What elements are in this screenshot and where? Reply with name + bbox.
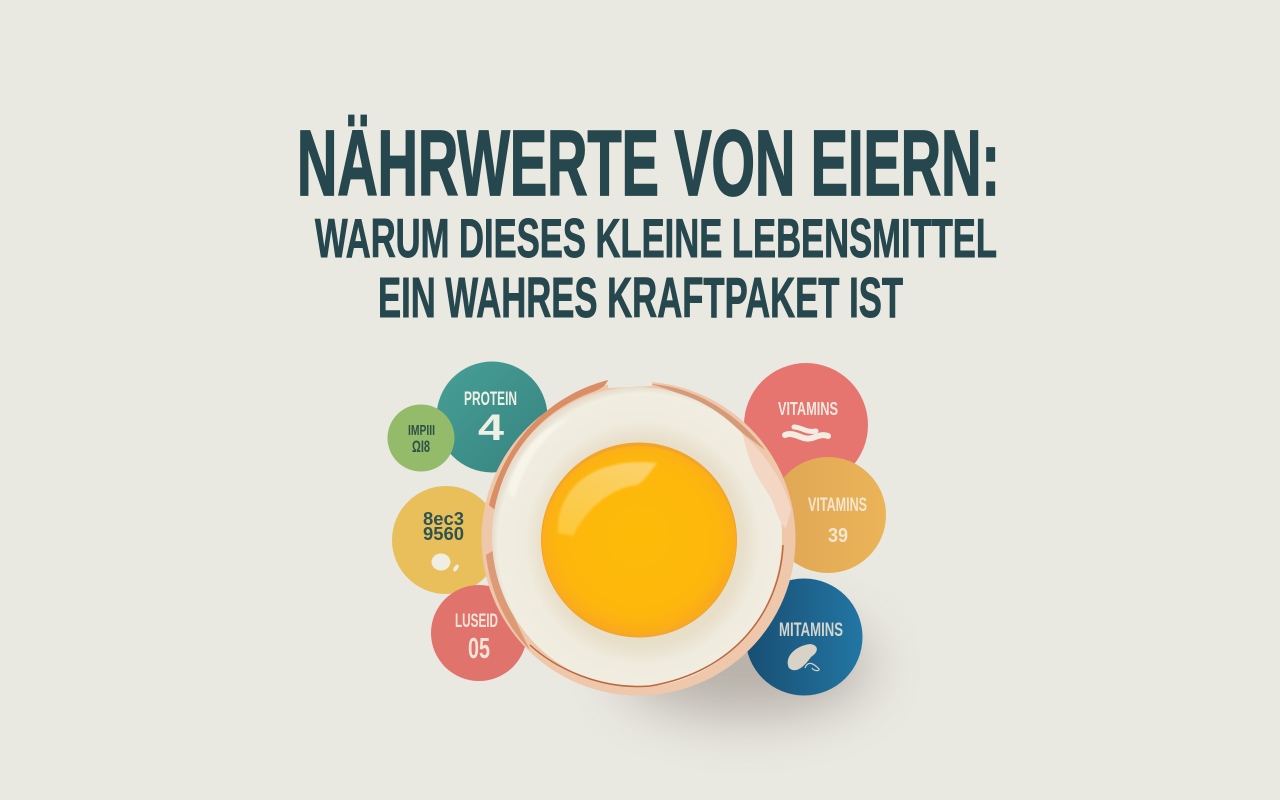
shell thin line: [530, 545, 783, 686]
title: [297, 111, 1000, 330]
shell gap at top: [608, 379, 652, 388]
egg: [482, 379, 796, 696]
circle: vitamins amber: 39: [828, 525, 848, 547]
circle: lutein: 05: [468, 633, 490, 665]
yolk highlight: [558, 462, 657, 536]
eggshell: [482, 380, 796, 696]
circle: vitamins amber: VITAMINS: [808, 495, 867, 516]
circle: vitamins blue: [746, 578, 862, 696]
title line 3: EIN WAHRES KRAFTPAKET IST: [378, 266, 903, 330]
yolk: [541, 442, 737, 638]
circle: protein: PROTEIN: [464, 389, 517, 410]
circle: yellow nutrient: 8ec3: [423, 509, 464, 529]
circle: vitamins red: VITAMINS: [778, 399, 838, 419]
circle: lutein: LUSEID: [455, 611, 498, 632]
circle: protein: 4: [478, 407, 505, 448]
egg white: [492, 387, 782, 687]
circle: lutein: [431, 585, 527, 681]
egg drop shadow: [620, 615, 870, 715]
shell fragment: [743, 435, 791, 528]
circle: protein: [436, 362, 548, 472]
circle: green nutrient: ΩI8: [412, 437, 430, 456]
circle: vitamins red: [744, 363, 868, 487]
yolk lower shading: [575, 565, 728, 629]
circle: yellow nutrient: [392, 486, 500, 594]
circle: vitamins blue: MITAMINS: [779, 620, 843, 641]
circle: yellow nutrient: 9560: [423, 524, 464, 544]
circle: green nutrient: IMPIII: [408, 422, 435, 439]
icon: wavy shape: [785, 427, 828, 439]
circle: green nutrient: [388, 404, 454, 472]
white highlight: [508, 418, 570, 500]
icon: egg: [432, 554, 460, 572]
icon: bean: [788, 644, 819, 671]
circle: vitamins amber: [770, 457, 886, 573]
